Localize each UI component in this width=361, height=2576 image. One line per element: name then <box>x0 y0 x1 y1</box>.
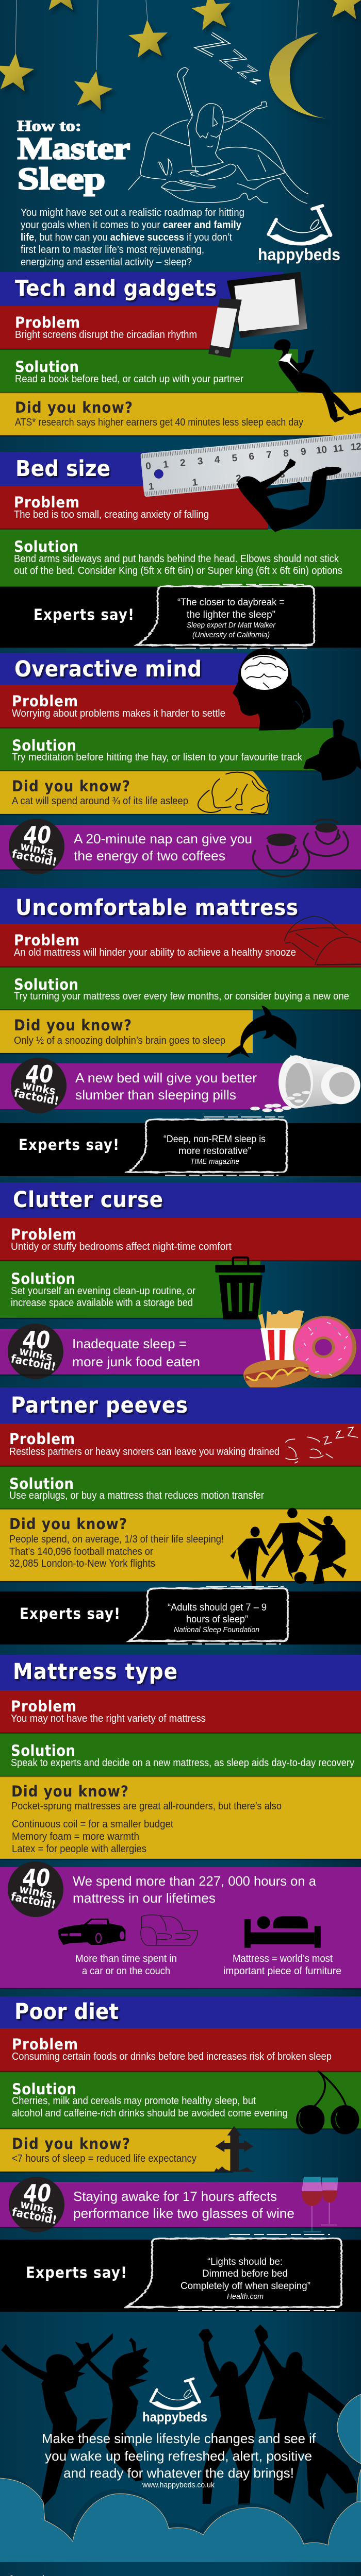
panel: problem: Problem <box>9 1430 75 1448</box>
speech bubble <box>128 1117 287 1175</box>
badge: 40 winks factoid: 40 <box>25 1060 53 1088</box>
panel: experts say: Experts say! <box>20 1605 120 1622</box>
speech bubble: Completely off when sleeping” <box>180 2281 310 2292</box>
panel: 40 winks factoid <box>0 819 361 877</box>
icon: ruler: 4 <box>323 465 330 476</box>
panel: 40 winks factoid: A 20-minute nap can give you <box>74 831 252 846</box>
panel: solution <box>0 728 333 771</box>
closing message: Make these simple lifestyle changes and see if <box>42 2431 316 2446</box>
panel: did you know: Pocket-sprung mattresses are great all-rounders, but there’s also <box>11 1801 282 1812</box>
speech bubble: the lighter the sleep” <box>187 609 275 620</box>
panel: solution: Solution <box>12 737 76 754</box>
icon: hanging stars <box>0 0 361 111</box>
panel: 40 winks factoid: the energy of two coffees <box>74 848 225 863</box>
badge: 40 winks factoid: winks <box>19 840 55 859</box>
panel: 40 winks factoid: performance like two glasses of wine <box>73 2206 294 2221</box>
panel: solution <box>0 349 298 393</box>
panel: did you know: Latex = for people with allergies <box>12 1843 146 1855</box>
icon: ruler: 10 <box>316 445 327 456</box>
panel: 40 winks factoid <box>0 1861 361 1988</box>
heading band <box>0 272 284 306</box>
heading band <box>0 1996 361 2028</box>
icon: sleeping cat <box>198 772 269 814</box>
badge: 40 winks factoid: 40 <box>22 1326 50 1354</box>
speech bubble: TIME magazine <box>190 1157 239 1166</box>
icon: ruler: 2 <box>179 457 186 469</box>
heading band <box>0 1387 361 1423</box>
section: clutter curse <box>0 1182 361 1389</box>
panel: problem: Problem <box>12 692 78 710</box>
speech bubble: “Adults should get 7 – 9 <box>168 1602 267 1613</box>
panel: 40 winks factoid: Inadequate sleep = <box>72 1336 187 1351</box>
panel: problem: Problem <box>14 931 79 949</box>
panel: solution <box>0 967 361 1010</box>
header: night sky <box>0 0 361 268</box>
panel: did you know <box>0 2129 233 2172</box>
badge: 40 winks factoid: 40 <box>23 2179 51 2207</box>
panel: solution <box>0 529 361 587</box>
panel: problem: Problem <box>11 1698 76 1715</box>
illustration: stretching woman in bed <box>128 67 308 204</box>
panel: did you know: 32,085 London-to-New York flights <box>9 1558 155 1569</box>
icon: wine glasses <box>302 2177 338 2232</box>
heading band: Bed size <box>15 456 110 482</box>
badge: 40 winks factoid: factoid! <box>11 848 58 869</box>
speech bubble <box>129 1586 288 1644</box>
panel: problem <box>0 1423 361 1466</box>
icon: ruler: 4 <box>214 454 221 466</box>
illustration: jumping people silhouettes <box>1 2325 361 2511</box>
heading band: Partner peeves <box>11 1393 188 1418</box>
panel: did you know <box>0 771 269 814</box>
closing message: and ready for whatever the day brings! <box>63 2465 294 2481</box>
logo: happybeds <box>142 2379 207 2425</box>
panel: solution <box>0 2072 361 2129</box>
panel: solution: Try meditation before hitting the hay, or listen to your favourite track <box>12 752 303 763</box>
title: how to: How to: <box>17 117 81 134</box>
icon: falling person silhouette <box>237 459 341 532</box>
icon: zzz <box>198 33 261 84</box>
hanging strings <box>15 0 299 70</box>
section: uncomfortable mattress <box>0 888 361 1176</box>
panel: did you know: <7 hours of sleep = reduced life expectancy <box>12 2153 196 2164</box>
heading band: Tech and gadgets <box>15 276 217 301</box>
panel: solution <box>0 1261 260 1318</box>
section: tech and gadgets <box>0 272 361 436</box>
badge: 40 winks factoid: factoid! <box>10 1352 57 1374</box>
panel: problem <box>0 1690 361 1733</box>
section: mattress type <box>0 1655 361 1989</box>
caption: car and couch: More than time spent in <box>75 1953 177 1964</box>
footer <box>0 2325 361 2576</box>
panel: problem <box>0 486 268 529</box>
speech bubble: hours of sleep” <box>186 1614 248 1625</box>
icon: grave cross <box>214 2126 254 2172</box>
icon: pillow outline <box>284 916 361 965</box>
heading band <box>0 1182 361 1218</box>
panel: problem <box>0 1218 361 1261</box>
panel: 40 winks factoid: slumber than sleeping pills <box>75 1087 236 1103</box>
panel: solution: Solution <box>14 538 78 555</box>
icon: smartphone <box>208 298 242 358</box>
badge: 40 winks factoid: winks <box>21 1079 57 1098</box>
panel: solution: Cherries, milk and cereals may promote healthy sleep, but <box>12 2095 256 2107</box>
heading band: Clutter curse <box>13 1187 163 1213</box>
panel: did you know: ATS* research says higher earners get 40 minutes less sleep each day <box>15 417 303 428</box>
badge: 40 winks factoid <box>11 1058 67 1113</box>
icon: hotdog <box>243 1360 310 1389</box>
panel: did you know: Did you know? <box>15 399 133 416</box>
panel: problem <box>0 306 222 349</box>
panel: did you know: Did you know? <box>12 2135 130 2153</box>
badge: 40 winks factoid: 40 <box>22 1864 50 1892</box>
panel: experts say <box>0 584 361 648</box>
panel: problem: Consuming certain foods or drinks before bed increases risk of broken sleep <box>12 2051 332 2062</box>
panel: 40 winks factoid: mattress in our lifetimes <box>73 1890 216 1906</box>
icon: ruler: 1 <box>162 459 169 470</box>
panel: 40 winks factoid <box>0 1324 361 1379</box>
heading band <box>0 1655 361 1690</box>
panel: problem: Untidy or stuffy bedrooms affect night-time comfort <box>11 1241 232 1252</box>
badge: 40 winks factoid: factoid! <box>10 1890 57 1912</box>
panel: 40 winks factoid <box>0 2177 361 2232</box>
panel: problem: The bed is too small, creating anxiety of falling <box>14 509 209 520</box>
speech bubble: Health.com <box>227 2292 264 2301</box>
icon: football players silhouettes <box>230 1508 347 1587</box>
speech bubble: Dimmed before bed <box>202 2268 288 2279</box>
panel: solution: Solution <box>14 976 78 993</box>
panel: did you know <box>0 1010 253 1053</box>
panel: experts say <box>0 1117 361 1176</box>
intro paragraph: energizing and essential activity – sleep? <box>21 257 192 268</box>
icon: ruler: 5 <box>232 453 238 464</box>
speech bubble: “Lights should be: <box>207 2257 283 2267</box>
panel: solution: Solution <box>11 1742 75 1759</box>
heading band: Overactive mind <box>14 656 202 682</box>
icon: snoring marks <box>286 1427 358 1463</box>
icon: ruler: 6 <box>249 451 255 463</box>
title: master: Master <box>18 131 130 165</box>
badge: 40 winks factoid <box>8 1324 63 1379</box>
icon: coffee cups <box>253 820 348 877</box>
panel: problem: An old mattress will hinder your ability to achieve a healthy snooze <box>14 947 296 958</box>
section: overactive mind <box>0 648 361 877</box>
panel: solution: Solution <box>12 2080 76 2098</box>
intro paragraph: You might have set out a realistic roadmap for hitting <box>21 207 244 218</box>
panel: solution: Solution <box>15 358 79 376</box>
panel: problem <box>0 685 263 728</box>
logo: happybeds: happybeds <box>258 245 340 264</box>
logo: happybeds: happybeds <box>142 2409 207 2425</box>
heading band: Uncomfortable mattress <box>15 895 298 921</box>
panel: 40 winks factoid: Staying awake for 17 hours affects <box>73 2189 277 2204</box>
closing message: www.happybeds.co.uk <box>142 2481 215 2489</box>
icon: ruler: 11 <box>333 443 344 454</box>
caption: mattress: Mattress = world’s most <box>233 1953 333 1964</box>
section: partner peeves <box>0 1387 361 1645</box>
heading band: Poor diet <box>14 1999 119 2025</box>
panel: 40 winks factoid: A new bed will give you better <box>75 1070 257 1086</box>
intro paragraph <box>21 207 244 268</box>
panel: experts say: Experts say! <box>19 1136 119 1154</box>
badge: 40 winks factoid: factoid! <box>13 1087 60 1108</box>
panel: 40 winks factoid: more junk food eaten <box>72 1354 200 1369</box>
panel: did you know <box>0 1509 361 1581</box>
panel: did you know: People spend, on average, 1/3 of their life sleeping! <box>9 1534 224 1545</box>
panel: problem: Bright screens disrupt the circadian rhythm <box>15 329 197 341</box>
icon: donut <box>293 1316 356 1379</box>
panel: problem: Problem <box>12 2036 78 2053</box>
icon: couch <box>141 1915 198 1945</box>
icon: woman reading silhouette <box>274 339 361 422</box>
panel: did you know: Memory foam = more warmth <box>12 1831 139 1842</box>
panel: did you know: Did you know? <box>11 1783 128 1800</box>
panel: solution <box>0 1733 361 1776</box>
caption: mattress <box>223 1953 341 1977</box>
icon: ruler: 7 <box>266 450 272 461</box>
icon: ruler <box>140 433 361 497</box>
icon: pill bottle <box>250 1055 360 1112</box>
caption: car and couch: a car or on the couch <box>82 1965 170 1977</box>
badge: 40 winks factoid <box>8 1861 63 1917</box>
caption: mattress: important piece of furniture <box>223 1965 341 1977</box>
badge: 40 winks factoid: 40 <box>23 821 51 849</box>
title: sleep: Sleep <box>18 162 105 196</box>
icon: dolphin <box>227 1006 297 1058</box>
icon: ruler: 2 <box>235 473 242 484</box>
closing message: you wake up feeling refreshed, alert, positive <box>45 2448 312 2464</box>
panel: experts say: Experts say! <box>34 606 134 623</box>
icon: meditating silhouette <box>303 719 361 781</box>
icon: ruler: 9 <box>300 446 307 457</box>
panel: problem: Problem <box>11 1226 76 1243</box>
icon: head with brain <box>233 648 310 731</box>
panel: did you know <box>0 393 361 435</box>
icon: ruler: 1 <box>192 477 199 488</box>
icon: tablet <box>227 272 307 338</box>
icon: cherries <box>296 2071 359 2134</box>
speech bubble: “Deep, non-REM sleep is <box>163 1134 266 1145</box>
speech bubble: (University of California) <box>192 631 270 639</box>
panel: solution: Bend arms sideways and put hands behind the head. Elbows should not stick <box>14 553 339 565</box>
panel: solution: increase space available with a storage bed <box>11 1297 193 1309</box>
intro paragraph: life, but how can you achieve success if you don’t <box>21 232 232 243</box>
speech bubble <box>137 584 314 648</box>
speech bubble <box>127 2234 341 2311</box>
heading band: Mattress type <box>13 1659 177 1685</box>
heading band <box>0 888 361 924</box>
panel: problem: You may not have the right variety of mattress <box>11 1713 206 1724</box>
badge: 40 winks factoid: winks <box>19 2198 55 2217</box>
caption: car and couch <box>75 1953 177 1977</box>
speech bubble: “The closer to daybreak = <box>177 597 285 608</box>
panel: experts say <box>0 2234 361 2312</box>
panel: solution: Read a book before bed, or catch up with your partner <box>15 374 243 385</box>
panel: did you know: Did you know? <box>9 1515 127 1533</box>
section: bed size <box>0 433 361 648</box>
section: poor diet <box>0 1996 361 2312</box>
heading band <box>0 653 248 685</box>
panel: experts say: Experts say! <box>26 2264 127 2281</box>
badge: 40 winks factoid: winks <box>18 1345 54 1364</box>
panel: problem: Restless partners or heavy snorers can leave you waking drained <box>9 1446 280 1458</box>
closing message <box>42 2431 316 2489</box>
intro paragraph: first learn to master life’s most rejuvenating, <box>21 244 204 256</box>
badge: 40 winks factoid: factoid! <box>11 2206 58 2227</box>
icon: bed with sleeper <box>244 1916 321 1948</box>
icon: waste bin <box>215 1258 265 1319</box>
panel: did you know: Only ½ of a snoozing dolphin’s brain goes to sleep <box>14 1035 225 1046</box>
panel: did you know: Did you know? <box>12 777 130 795</box>
icon: ruler: 3 <box>197 456 203 467</box>
logo: happybeds <box>258 206 340 264</box>
icon: fries <box>258 1310 304 1377</box>
panel: solution: Set yourself an evening clean-up routine, or <box>11 1285 195 1297</box>
badge: 40 winks factoid: winks <box>18 1883 54 1902</box>
panel: solution <box>0 1466 361 1509</box>
badge: 40 winks factoid <box>9 819 64 874</box>
panel: solution: Solution <box>9 1475 74 1493</box>
badge: 40 winks factoid <box>9 2177 64 2232</box>
illustration: clouds <box>0 2394 361 2562</box>
speech bubble: National Sleep Foundation <box>174 1625 259 1634</box>
panel: did you know: Continuous coil = for a smaller budget <box>12 1819 173 1830</box>
panel: did you know: A cat will spend around ¾ of its life asleep <box>12 795 188 807</box>
panel: did you know <box>0 1776 361 1859</box>
panel: did you know: Did you know? <box>14 1016 132 1034</box>
panel: problem: Problem <box>15 314 80 331</box>
heading band <box>0 452 165 486</box>
panel: 40 winks factoid <box>0 1058 289 1113</box>
speech bubble: Sleep expert Dr Matt Walker <box>187 621 276 630</box>
panel: problem <box>0 2028 361 2072</box>
panel: problem: Problem <box>14 494 79 511</box>
panel: did you know: That’s 140,096 football matches or <box>9 1546 153 1557</box>
panel: experts say <box>0 1586 361 1645</box>
panel: solution: out of the bed. Consider King (5ft x 6ft 6in) or Super king (6ft x 6ft 6in) options <box>14 565 342 577</box>
icon: ruler: 1 <box>148 481 155 493</box>
panel: problem <box>0 924 361 967</box>
icon: crescent moon <box>269 32 327 118</box>
intro paragraph: your goals when it comes to your career and family <box>21 219 242 231</box>
panel: solution: Use earplugs, or buy a mattress that reduces motion transfer <box>9 1490 264 1501</box>
panel: solution: alcohol and caffeine-rich drinks should be avoided come evening <box>12 2108 288 2119</box>
icon: ruler: 0 <box>145 461 152 472</box>
icon: ruler: 3 <box>279 469 286 480</box>
speech bubble: more restorative” <box>178 1146 251 1157</box>
panel: 40 winks factoid: We spend more than 227, 000 hours on a <box>73 1873 317 1889</box>
panel: problem: Worrying about problems makes it harder to settle <box>12 708 225 719</box>
panel: solution: Solution <box>11 1270 75 1287</box>
icon: car <box>58 1919 125 1945</box>
icon: ruler: 8 <box>283 448 289 459</box>
